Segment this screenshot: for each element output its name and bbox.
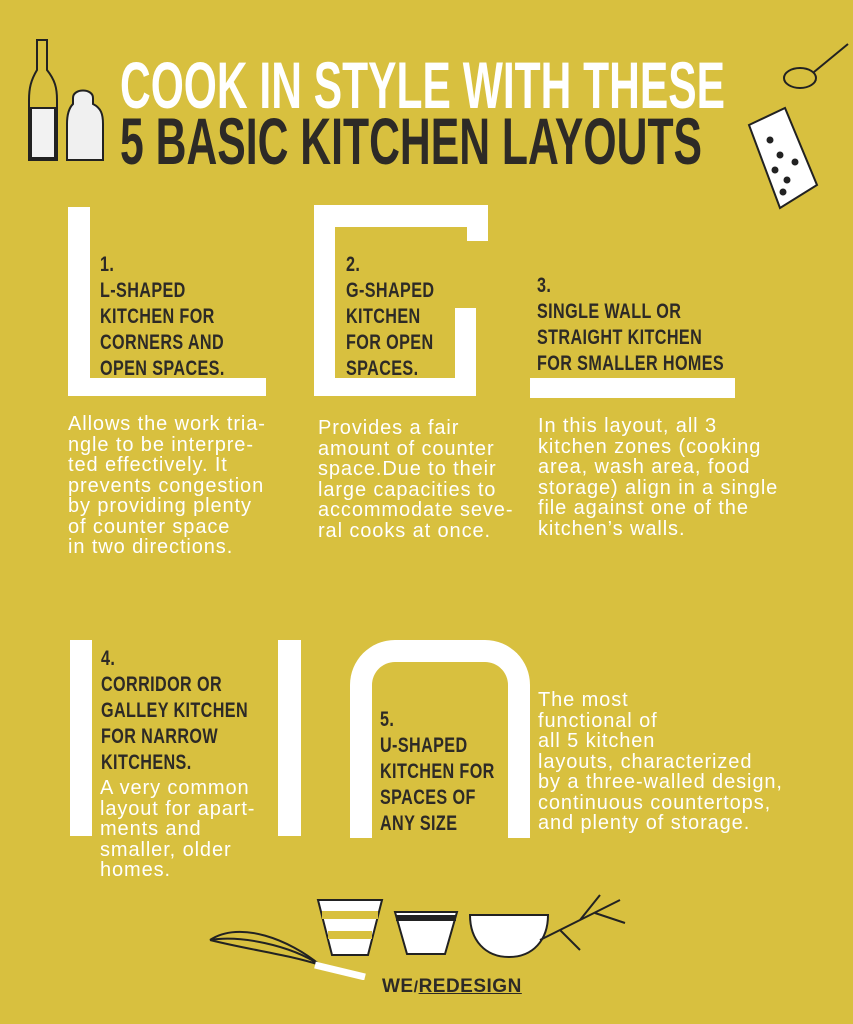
text 5: functional of xyxy=(538,710,658,732)
text 2: Provides a fair xyxy=(318,417,459,439)
heading 2: KITCHEN xyxy=(346,305,421,328)
heading 5: 5. xyxy=(380,708,394,731)
text 1 xyxy=(68,413,266,558)
heading 3: 3. xyxy=(537,274,551,297)
shape: single wall xyxy=(530,378,735,398)
text 2: amount of counter xyxy=(318,438,495,460)
shape: galley xyxy=(70,640,301,836)
heading 4: FOR NARROW xyxy=(101,725,218,748)
text 5: by a three-walled design, xyxy=(538,771,783,793)
icon: grater xyxy=(748,106,818,210)
text 2 xyxy=(318,417,513,542)
text 1: by providing plenty xyxy=(68,495,252,517)
text 1: ngle to be interpre- xyxy=(68,434,254,456)
text 5: and plenty of storage. xyxy=(538,812,750,834)
text 4 xyxy=(100,777,255,881)
text 3 xyxy=(538,415,778,540)
heading 5 xyxy=(380,708,495,835)
heading 4: GALLEY KITCHEN xyxy=(101,699,248,722)
text 3: storage) align in a single xyxy=(538,476,778,498)
title xyxy=(120,48,725,178)
heading 1: L-SHAPED xyxy=(100,279,186,302)
text 4: A very common xyxy=(100,777,250,799)
heading 4 xyxy=(101,647,248,774)
text 1: ted effectively. It xyxy=(68,454,228,476)
heading 2: FOR OPEN xyxy=(346,331,434,354)
text 2: ral cooks at once. xyxy=(318,520,491,542)
heading 5: SPACES OF xyxy=(380,786,476,809)
heading 2 xyxy=(346,253,434,380)
heading 5: KITCHEN FOR xyxy=(380,760,495,783)
text 3: kitchen’s walls. xyxy=(538,518,685,540)
text 5: all 5 kitchen xyxy=(538,730,655,752)
heading 2: G-SHAPED xyxy=(346,279,434,302)
heading 4: 4. xyxy=(101,647,115,670)
heading 4: KITCHENS. xyxy=(101,751,192,774)
heading 1: OPEN SPACES. xyxy=(100,357,225,380)
text 5: The most xyxy=(538,689,629,711)
text 4: layout for apart- xyxy=(100,798,255,820)
shape: U xyxy=(350,640,530,838)
illustration: whisk, bowls, rosemary xyxy=(210,894,626,980)
text 3: kitchen zones (cooking xyxy=(538,436,761,458)
heading 5: U-SHAPED xyxy=(380,734,468,757)
shape: L xyxy=(68,207,266,396)
text 5: layouts, characterized xyxy=(538,750,752,772)
heading 3: FOR SMALLER HOMES xyxy=(537,352,724,375)
text 4: ments and xyxy=(100,818,202,840)
heading 2: SPACES. xyxy=(346,357,418,380)
text 1: prevents congestion xyxy=(68,474,264,496)
text 4: smaller, older xyxy=(100,838,232,860)
heading 4: CORRIDOR OR xyxy=(101,673,222,696)
text 3: In this layout, all 3 xyxy=(538,415,717,437)
heading 3 xyxy=(537,274,724,375)
heading 5: ANY SIZE xyxy=(380,812,457,835)
icon: spoon xyxy=(783,43,849,89)
heading 1: CORNERS AND xyxy=(100,331,224,354)
heading 2: 2. xyxy=(346,253,360,276)
heading 1 xyxy=(100,253,225,380)
text 2: large capacities to xyxy=(318,478,496,500)
text 5: continuous countertops, xyxy=(538,792,771,814)
heading 3: STRAIGHT KITCHEN xyxy=(537,326,702,349)
heading 1: KITCHEN FOR xyxy=(100,305,215,328)
text 4: homes. xyxy=(100,859,171,881)
text 5 xyxy=(538,689,783,834)
icon: bottle and salt shaker xyxy=(28,39,104,161)
text 2: accommodate seve- xyxy=(318,499,513,521)
text 1: in two directions. xyxy=(68,536,233,558)
text 1: of counter space xyxy=(68,516,230,538)
shape: G xyxy=(314,205,488,396)
text 3: area, wash area, food xyxy=(538,456,750,478)
text 3: file against one of the xyxy=(538,497,749,519)
text 2: space.Due to their xyxy=(318,458,497,480)
heading 3: SINGLE WALL OR xyxy=(537,300,681,323)
logo: WE/REDESIGN xyxy=(382,976,522,997)
heading 1: 1. xyxy=(100,253,114,276)
text 1: Allows the work tria- xyxy=(68,413,266,435)
